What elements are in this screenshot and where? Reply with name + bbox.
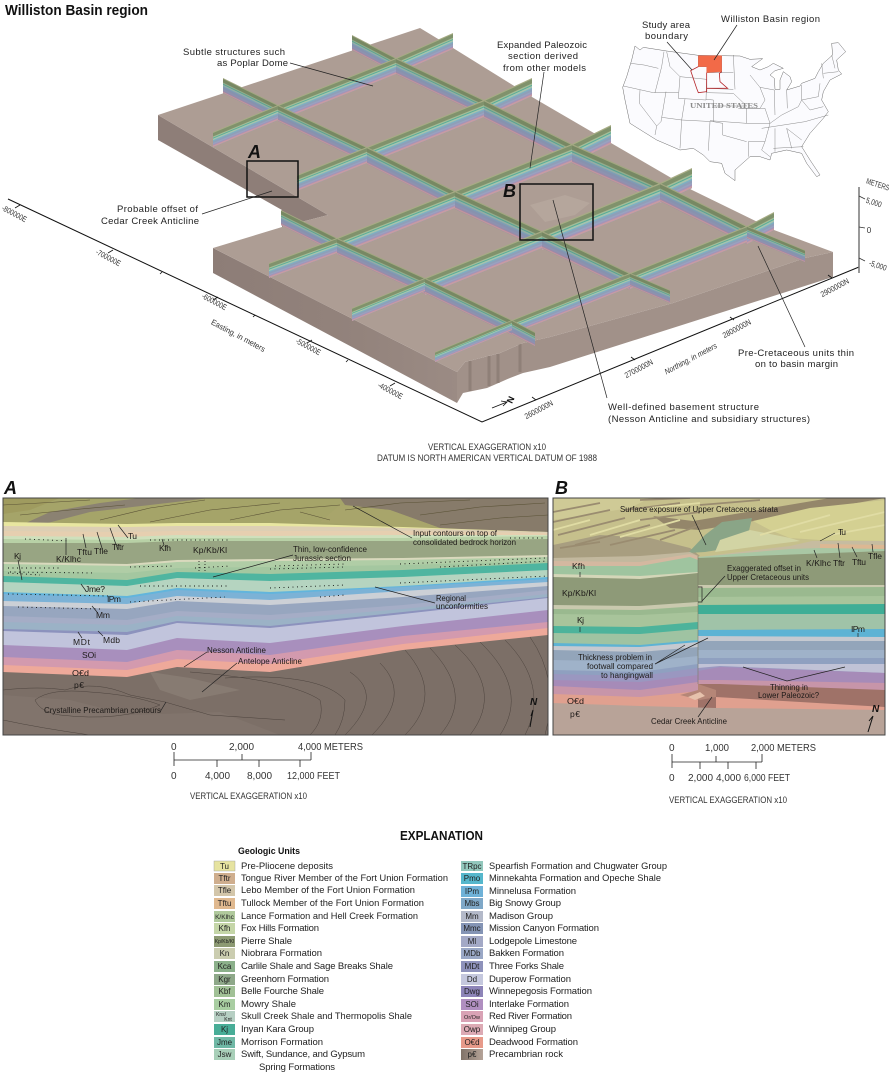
block left face upper	[158, 115, 328, 227]
panel A unit labels: Kj	[14, 551, 21, 561]
Williston Basin region fill	[698, 56, 722, 73]
panel B labels: to hangingwall	[601, 670, 653, 680]
block front face	[457, 252, 833, 403]
note: block vertical exaggeration and datum: DATUM IS NORTH AMERICAN VERTICAL DATUM OF 1988	[377, 453, 597, 463]
panel A unit labels: Mm	[96, 610, 110, 620]
panel B labels: Kp/Kb/Kl	[562, 588, 596, 598]
legend: right column: Winnepegosis Formation	[489, 986, 592, 997]
legend: left column: Jsw	[218, 1050, 232, 1059]
panel A callouts: Crystalline Precambrian contours	[44, 705, 161, 715]
Easting and Northing axes	[0, 177, 889, 422]
scale bar: panel B: 1,000	[705, 743, 729, 754]
panel A callouts: Regional	[436, 593, 466, 603]
easting labels: Easting, in meters	[210, 318, 267, 354]
vertical scale axis: 5,000	[865, 196, 883, 210]
legend: right column: Three Forks Shale	[489, 961, 564, 972]
legend: right column: Big Snowy Group	[489, 898, 561, 909]
hanging wall strata, right of fault	[680, 541, 884, 710]
legend: right column: p€	[468, 1050, 477, 1059]
scale bar: panel A: 0	[171, 742, 177, 753]
panel A unit labels: Tftu	[77, 547, 92, 557]
state boundaries	[623, 52, 838, 157]
block left face lower	[213, 248, 457, 403]
legend: left column: Greenhorn Formation	[241, 974, 329, 985]
panel A callouts: Input contours on top of	[413, 528, 498, 538]
panel B: cross-section view	[553, 498, 885, 735]
callout: pre-Cretaceous thinning	[738, 246, 854, 370]
northing labels: 2800000N	[721, 317, 753, 340]
map outline	[623, 43, 846, 181]
callout: basement structure: (Nesson Anticline and subsidiary structures)	[608, 414, 810, 425]
panel B labels: Tu	[838, 527, 846, 537]
callout: pre-Cretaceous thinning: on to basin margin	[755, 359, 838, 370]
legend: right column: Precambrian rock	[489, 1049, 563, 1060]
icon: panel A north arrow: N	[530, 697, 538, 708]
legend: right column: MDb	[464, 949, 481, 958]
scale bar: panel B: 2,000 METERS	[751, 743, 816, 754]
legend: left column: Kns/	[216, 1012, 227, 1018]
legend: right column: Mmc	[463, 924, 481, 933]
panel A callouts: Thin, low-confidence	[293, 544, 367, 554]
legend: right column: Ml	[468, 937, 476, 946]
panel B labels: IPm	[851, 624, 865, 634]
scale bar: panel B: 0	[669, 743, 675, 754]
scale bar: panel A: 4,000 METERS	[298, 742, 363, 753]
panel A unit labels: O€d	[72, 668, 89, 678]
legend: left column: Fox Hills Formation	[241, 923, 319, 934]
legend: left column: Lance Formation and Hell Creek Formation	[241, 911, 418, 922]
panel A unit labels	[14, 531, 227, 690]
legend: right column: Lodgepole Limestone	[489, 936, 577, 947]
block top surface	[158, 28, 833, 372]
panel B labels: Surface exposure of Upper Cretaceous strata	[620, 504, 778, 514]
legend: right column: Spearfish Formation and Chugwater Group	[489, 861, 667, 872]
legend: right column: TRpc	[462, 862, 482, 871]
callout: Cedar Creek offset: Probable offset of	[117, 204, 198, 215]
legend: right column	[461, 861, 667, 1060]
legend: left column: Swift, Sundance, and Gypsum	[241, 1049, 365, 1060]
title: Williston Basin region	[5, 2, 148, 19]
legend: right column: Winnipeg Group	[489, 1024, 556, 1035]
scale bar: panel B: 6,000 FEET	[744, 773, 790, 784]
panel B labels: Cedar Creek Anticline	[651, 716, 727, 726]
legend: left column: Tfle	[218, 886, 232, 895]
basement in panel B	[553, 703, 885, 735]
explanation heading: EXPLANATION	[400, 829, 483, 843]
panel B labels: Exaggerated offset in	[727, 563, 801, 573]
legend: left column: Carlile Shale and Sage Breaks Shale	[241, 961, 393, 972]
legend: left column: Skull Creek Shale and Thermopolis Shale	[241, 1011, 412, 1022]
icon: panel B north arrow	[868, 704, 880, 732]
panel A unit labels: Jme?	[85, 584, 105, 594]
panel B labels: Upper Cretaceous units	[727, 572, 809, 582]
panel A: cross-section view	[3, 498, 550, 735]
legend: right column: Owp	[464, 1025, 481, 1034]
scale bar: panel B: 0	[669, 773, 675, 784]
callout: A locator box: A	[247, 142, 261, 162]
panel A unit labels: p€	[74, 680, 84, 690]
panel A border	[3, 498, 548, 735]
legend: left column: Pierre Shale	[241, 936, 292, 947]
strata layers	[3, 522, 548, 735]
panel A unit labels: MDt	[73, 637, 91, 647]
easting labels: -700000E	[94, 247, 122, 268]
scale bar: panel B: VERTICAL EXAGGERATION x10	[669, 795, 787, 805]
heading: panel A: A	[3, 478, 17, 498]
scale bar: panel A: 12,000 FEET	[287, 771, 340, 782]
note: block vertical exaggeration and datum: VERTICAL EXAGGERATION x10	[428, 442, 546, 452]
scale bar: panel A: 4,000	[205, 771, 230, 782]
panel B labels: K/Klhc	[806, 558, 832, 568]
panel B labels: Thickness problem in	[578, 652, 652, 662]
legend: right column: Minnelusa Formation	[489, 886, 576, 897]
easting labels: -600000E	[200, 291, 228, 312]
legend: right column: Mission Canyon Formation	[489, 923, 599, 934]
panel A unit labels: IPm	[107, 594, 121, 604]
scale bar: panel A	[171, 742, 363, 801]
legend: left column: Morrison Formation	[241, 1037, 323, 1048]
legend: left column: Kn	[220, 949, 229, 958]
heading: panel B: B	[555, 478, 568, 498]
striated front face	[470, 344, 520, 391]
legend: left column: Mowry Shale	[241, 999, 296, 1010]
callout: basement structure: Well-defined basement structure	[608, 402, 759, 413]
terrain texture	[3, 498, 548, 534]
legend: left column: Kfh	[218, 924, 231, 933]
panel A callouts: unconformities	[436, 601, 488, 611]
panel A unit labels: Tftr	[112, 542, 124, 552]
northing labels	[523, 276, 851, 421]
panel A callouts: Nesson Anticline	[207, 645, 266, 655]
callout: A locator box	[247, 142, 298, 197]
study area boundary	[691, 67, 707, 93]
panel B border	[553, 498, 885, 735]
surface texture near Nesson structure	[530, 195, 590, 222]
callout: subtle structures: as Poplar Dome	[217, 58, 288, 69]
easting labels	[0, 203, 404, 401]
legend: left column: Knt	[224, 1017, 232, 1023]
scale bar: panel A: 2,000	[229, 742, 254, 753]
callout: basement structure	[553, 200, 810, 425]
legend: right column: Interlake Formation	[489, 999, 569, 1010]
easting labels: -800000E	[0, 203, 28, 224]
footwall strata, left of fault	[554, 552, 698, 708]
panel B labels: footwall compared	[587, 661, 653, 671]
panel A callouts: consolidated bedrock horizon	[413, 537, 516, 547]
northing labels: 2700000N	[623, 357, 655, 380]
geologic fence sections	[213, 33, 805, 362]
icon: panel B north arrow: N	[872, 704, 880, 715]
panel B labels: Thinning in	[770, 682, 808, 692]
legend: right column: Mm	[465, 912, 479, 921]
legend: right column: Or/Ow	[464, 1015, 480, 1021]
legend: right column: Madison Group	[489, 911, 553, 922]
3D block model	[158, 28, 833, 403]
callout: expanded Paleozoic: section derived	[508, 51, 578, 62]
legend: left column: Jme	[217, 1038, 233, 1047]
callout: B locator box: B	[503, 181, 516, 201]
easting labels: -400000E	[376, 380, 404, 401]
terrain texture	[553, 498, 885, 560]
panel B labels: p€	[570, 709, 580, 719]
panel B labels: Tftu	[852, 557, 866, 567]
legend: right column: SOi	[465, 1000, 479, 1009]
panel B labels: Kj	[577, 615, 584, 625]
northing labels: 2900000N	[819, 276, 851, 299]
legend: right column: MDt	[465, 962, 480, 971]
panel A unit labels: Mdb	[103, 635, 120, 645]
legend: right column: Minnekahta Formation and Opeche Shale	[489, 873, 661, 884]
legend: left column: Pre-Pliocene deposits	[241, 861, 333, 872]
callout: pre-Cretaceous thinning: Pre-Cretaceous units thin	[738, 348, 854, 359]
map labels: Study area	[642, 20, 691, 31]
scale bar: panel A: 0	[171, 771, 177, 782]
legend: left column: Tongue River Member of the Fort Union Formation	[241, 873, 448, 884]
legend: right column: Pmo	[464, 874, 481, 883]
legend: right column: Bakken Formation	[489, 948, 564, 959]
legend: left column: Lebo Member of the Fort Union Formation	[241, 885, 415, 896]
panel B labels: Lower Paleozoic?	[758, 690, 819, 700]
legend: left column: Inyan Kara Group	[241, 1024, 314, 1035]
icon: panel A north arrow	[530, 697, 538, 727]
northing labels: 2600000N	[523, 398, 555, 421]
basement contours	[3, 637, 550, 735]
scale bar: panel B	[669, 743, 816, 805]
panel A unit labels: SOi	[82, 650, 96, 660]
panel B labels: Tftr	[833, 558, 845, 568]
callout: subtle structures	[183, 47, 373, 86]
legend: left column: Km	[218, 1000, 231, 1009]
northing labels: Northing, in meters	[663, 341, 719, 376]
legend: left column: Tullock Member of the Fort Union Formation	[241, 898, 424, 909]
panel A callouts	[18, 506, 516, 715]
north arrow on base	[492, 395, 517, 408]
legend: right column: IPm	[465, 887, 479, 896]
panel B labels	[562, 504, 882, 726]
well control dots	[8, 538, 548, 609]
legend: right column: Red River Formation	[489, 1011, 572, 1022]
legend: left column: Kca	[218, 962, 232, 971]
scale bar: panel A: VERTICAL EXAGGERATION x10	[190, 791, 307, 801]
inset map of United States: boundary	[645, 31, 688, 42]
scale bar: panel B: 4,000	[716, 773, 741, 784]
panel A unit labels: K/Klhc	[56, 554, 82, 564]
callout: expanded Paleozoic	[497, 40, 587, 168]
panel A unit labels: Kp/Kb/Kl	[193, 545, 227, 555]
legend: left column: Tu	[220, 862, 229, 871]
legend: left column: Kp/Kb/Kl	[215, 939, 234, 945]
callout: Cedar Creek offset	[101, 191, 272, 227]
callout: expanded Paleozoic: from other models	[503, 63, 586, 74]
panel B labels: O€d	[567, 696, 584, 706]
easting labels: -500000E	[294, 336, 322, 357]
legend: left column: Kj	[221, 1025, 228, 1034]
legend: left column	[214, 861, 448, 1073]
inset map of United States: Williston Basin region	[721, 14, 820, 25]
legend: right column: Dwg	[464, 987, 480, 996]
vertical scale axis	[859, 177, 889, 273]
legend: left column: Kgr	[218, 975, 231, 984]
legend: left column: Tftu	[218, 899, 231, 908]
north arrow on base: N	[505, 395, 517, 405]
panel A unit labels: Tfle	[94, 546, 108, 556]
callout: expanded Paleozoic: Expanded Paleozoic	[497, 40, 587, 51]
legend subheading: Geologic Units	[238, 846, 300, 857]
panel A callouts: Antelope Anticline	[238, 656, 302, 666]
inset map of United States	[623, 14, 846, 181]
legend: right column: Mbs	[464, 899, 480, 908]
scale bar: panel A: 8,000	[247, 771, 272, 782]
inset map of United States: UNITED STATES	[690, 101, 758, 110]
callout: subtle structures: Subtle structures such	[183, 47, 285, 58]
legend: right column: Deadwood Formation	[489, 1037, 578, 1048]
legend: right column: O€d	[464, 1038, 480, 1047]
legend: left column: Tftr	[218, 874, 231, 883]
panel B labels: Kfh	[572, 561, 585, 571]
legend: right column: Duperow Formation	[489, 974, 571, 985]
legend: left column: Belle Fourche Shale	[241, 986, 324, 997]
legend: right column: Dd	[467, 975, 477, 984]
scale bar: panel B: 2,000	[688, 773, 713, 784]
callout: B locator box	[503, 181, 593, 240]
panel A unit labels: Kfh	[159, 543, 171, 553]
legend: left column: Niobrara Formation	[241, 948, 322, 959]
panel A callouts: Jurassic section	[293, 553, 351, 563]
panel A unit labels: Tu	[128, 531, 137, 541]
legend: left column: Kbf	[218, 987, 231, 996]
panel B labels: Tfle	[868, 551, 882, 561]
legend: left column: Spring Formations	[259, 1062, 335, 1073]
vertical scale axis: 0	[867, 226, 872, 235]
legend: left column: K/Klhc	[215, 914, 235, 921]
note: block vertical exaggeration and datum	[377, 442, 597, 463]
callout: Cedar Creek offset: Cedar Creek Anticline	[101, 216, 199, 227]
